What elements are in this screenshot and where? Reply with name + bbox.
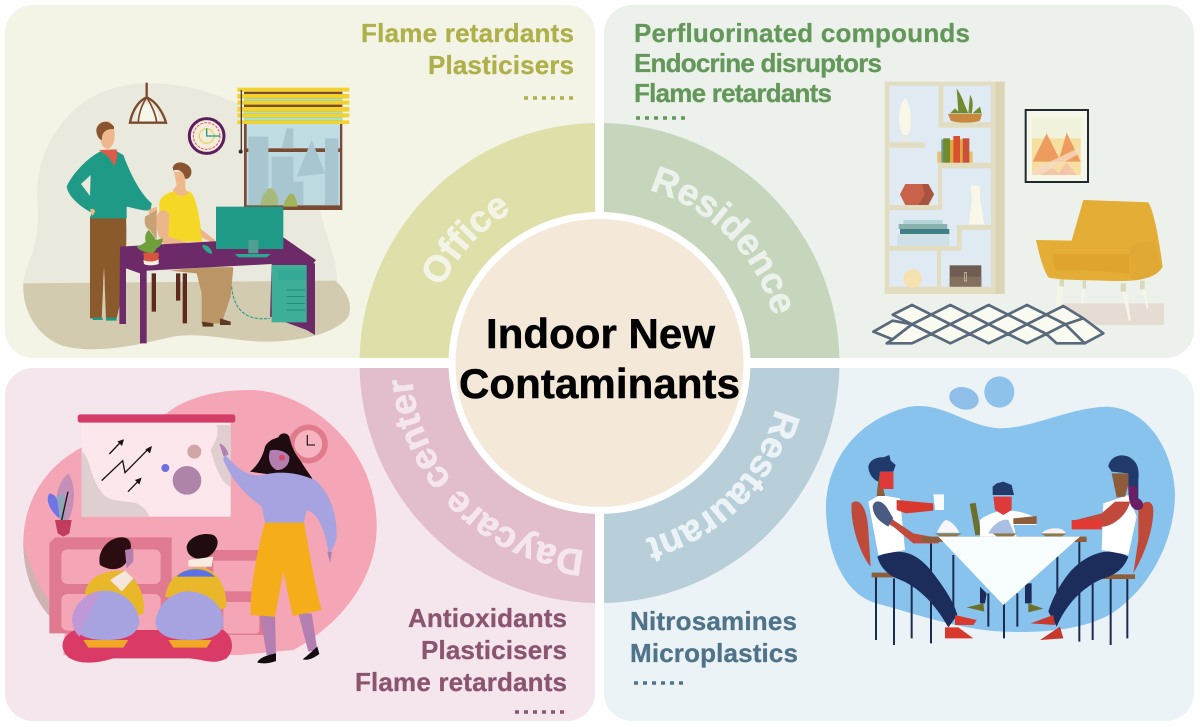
icon: computer monitor bbox=[202, 207, 283, 257]
panel: residence background bbox=[604, 5, 1194, 358]
text block: daycare center contaminants: Flame retardants bbox=[355, 667, 567, 697]
cushion bbox=[63, 630, 232, 663]
figure: standing man bbox=[67, 121, 157, 321]
center circle bbox=[448, 212, 750, 514]
armchair bbox=[1036, 200, 1164, 325]
text block: residence contaminants: Flame retardants bbox=[634, 78, 832, 108]
title: Contaminants bbox=[459, 360, 740, 407]
text block: residence contaminants bbox=[634, 18, 970, 118]
text block: residence contaminants: Endocrine disruptors bbox=[634, 48, 882, 78]
icon: window with blinds bbox=[237, 88, 349, 210]
icon: wall clock bbox=[189, 119, 224, 153]
panel: daycare center background bbox=[5, 368, 595, 721]
text block: daycare center contaminants: Plasticisers bbox=[421, 635, 567, 665]
text block: office contaminants bbox=[361, 18, 574, 98]
panel: office background bbox=[5, 5, 595, 358]
framed art bbox=[1026, 110, 1088, 182]
text block: restaurant contaminants: Nitrosamines bbox=[630, 606, 797, 636]
illustration: office scene bbox=[23, 83, 350, 349]
projection screen bbox=[78, 414, 235, 517]
ring label: Restaurant: Restaurant bbox=[646, 410, 800, 562]
title bbox=[459, 310, 740, 407]
patterned rug bbox=[873, 305, 1103, 343]
figure: woman bbox=[1031, 455, 1143, 640]
icon: potted plant bbox=[137, 230, 163, 265]
illustration: residence scene bbox=[873, 82, 1164, 343]
figure: seated child left bbox=[72, 537, 144, 648]
text block: office contaminants: Plasticisers bbox=[428, 50, 574, 80]
ring: restaurant quadrant bbox=[604, 368, 839, 603]
figure: seated child right bbox=[155, 534, 227, 648]
bookshelf bbox=[885, 82, 1005, 294]
panel: restaurant background bbox=[604, 368, 1194, 721]
table legs and chairs bbox=[852, 501, 1153, 645]
desk bbox=[119, 237, 316, 343]
ring label: Residence: Residence bbox=[651, 166, 790, 314]
text block: daycare center contaminants bbox=[355, 603, 567, 712]
text block: daycare center contaminants: Antioxidants bbox=[408, 603, 567, 633]
text block: office contaminants: Flame retardants bbox=[361, 18, 574, 48]
table with tablecloth and dishes bbox=[922, 520, 1087, 605]
title: Indoor New bbox=[486, 310, 715, 357]
ring: residence quadrant bbox=[604, 123, 839, 358]
illustration: daycare scene bbox=[23, 390, 377, 663]
ring label: Office: Office bbox=[424, 198, 508, 282]
text block: restaurant contaminants: Microplastics bbox=[630, 638, 798, 668]
text block: restaurant contaminants bbox=[630, 606, 798, 683]
illustration: restaurant scene bbox=[826, 376, 1175, 645]
background blob bbox=[826, 376, 1175, 632]
figure: seated woman bbox=[145, 162, 233, 327]
ring: office quadrant bbox=[360, 123, 595, 358]
ring label: Daycare center: Daycare center bbox=[392, 380, 582, 576]
figure: man bbox=[868, 455, 977, 638]
text block: residence contaminants: Perfluorinated compounds bbox=[634, 18, 970, 48]
ring: daycare center quadrant bbox=[360, 368, 595, 603]
icon: pendant lamp bbox=[130, 83, 166, 123]
figure: child bbox=[967, 482, 1043, 612]
icon: potted plant bbox=[48, 473, 74, 537]
figure: teacher bbox=[219, 433, 337, 663]
cabinet bbox=[49, 537, 263, 635]
icon: wall clock bbox=[292, 427, 325, 461]
